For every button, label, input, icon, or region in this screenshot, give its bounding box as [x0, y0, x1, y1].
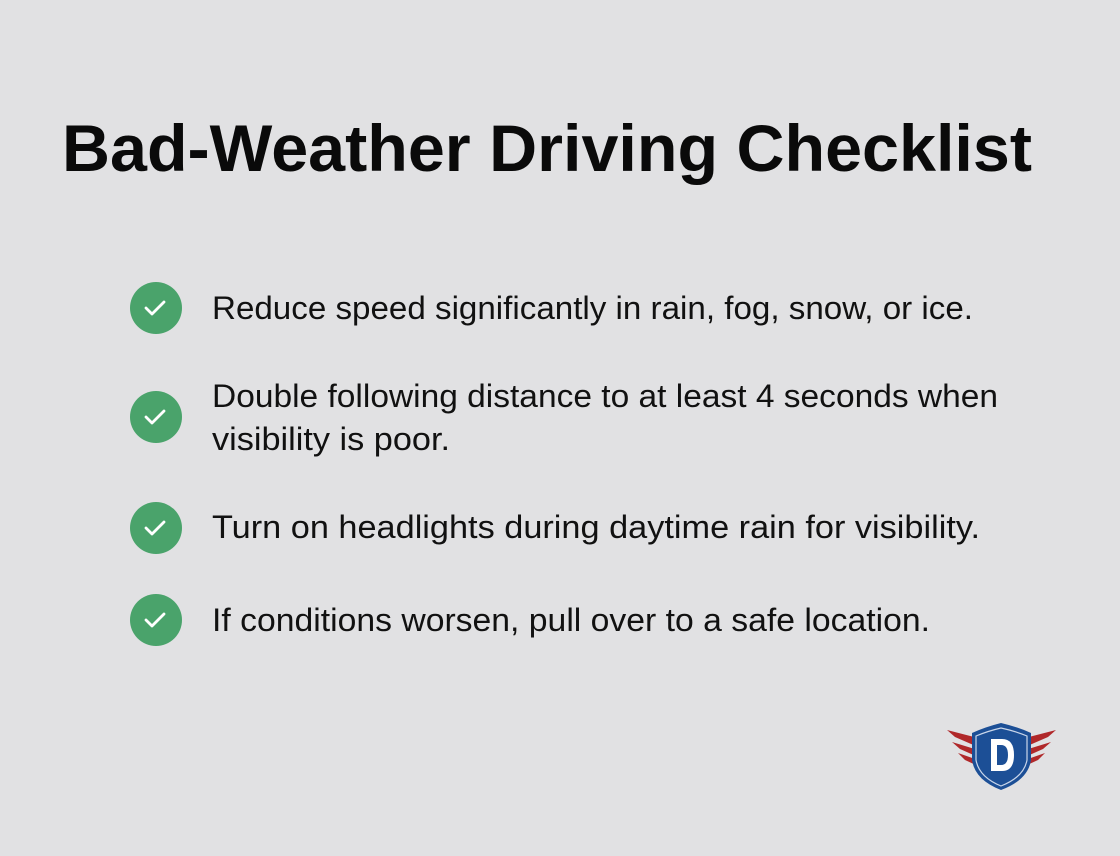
title: Bad-Weather Driving Checklist — [62, 111, 1032, 185]
text 4: If conditions worsen, pull over to a safe location. — [212, 602, 930, 638]
icon: check 3 — [130, 502, 182, 554]
icon: check 1 — [130, 282, 182, 334]
item 1 — [130, 282, 973, 334]
text 1: Reduce speed significantly in rain, fog, snow, or ice. — [212, 290, 973, 326]
text 2: visibility is poor. — [212, 421, 450, 457]
text 2: Double following distance to at least 4 seconds when — [212, 378, 998, 414]
checklist — [130, 282, 998, 646]
icon: check 4 — [130, 594, 182, 646]
item 2 — [130, 378, 998, 457]
icon: check 2 — [130, 391, 182, 443]
text 3: Turn on headlights during daytime rain for visibility. — [212, 509, 980, 545]
item 3 — [130, 502, 980, 554]
item 4 — [130, 594, 930, 646]
logo: winged shield — [947, 723, 1056, 790]
